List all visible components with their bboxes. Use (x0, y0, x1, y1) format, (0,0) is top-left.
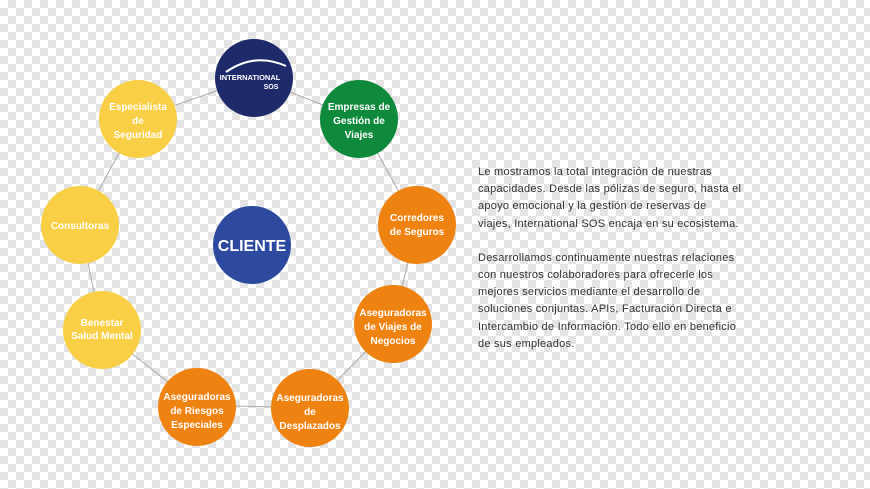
node: Aseguradoras de Viajes de Negocios: de Viajes de (364, 322, 422, 333)
node: Empresas de Gestión de Viajes: Empresas de (328, 102, 391, 113)
text block: description: de sus empleados. (478, 338, 575, 350)
node: Especialista de Seguridad: Seguridad (114, 130, 162, 141)
text block: description: capacidades. Desde las pólizas de seguro, hasta el (478, 183, 741, 195)
text block: description: mejores servicios mediante el desarrollo de (478, 286, 700, 298)
node: Empresas de Gestión de Viajes: Viajes (345, 130, 374, 141)
node: Benestar Salud Mental: Salud Mental (71, 331, 133, 342)
text block: description: Le mostramos la total integración de nuestras (478, 166, 712, 178)
node: International SOS: SOS (264, 84, 279, 91)
text block: description (478, 166, 741, 350)
node: Aseguradoras de Riesgos Especiales: Aseguradoras (163, 392, 231, 403)
node: Aseguradoras de Desplazados: Aseguradoras (276, 393, 344, 404)
node: Aseguradoras de Riesgos Especiales: de Riesgos (170, 406, 224, 417)
node: Corredores de Seguros: Corredores (390, 213, 444, 224)
text block: description: apoyo emocional y la gestión de reservas de (478, 200, 706, 212)
center: CLIENTE (213, 206, 291, 284)
text block: description: Intercambio de Información. Todo ello en beneficio (478, 321, 736, 333)
text block: description: con nuestros colaboradores para ofrecerle los (478, 269, 713, 281)
node: International SOS (215, 39, 293, 117)
node: Corredores de Seguros (378, 186, 456, 264)
node: Aseguradoras de Desplazados: de (304, 407, 316, 418)
node: Empresas de Gestión de Viajes (320, 80, 398, 158)
node: Especialista de Seguridad: Especialista (109, 102, 167, 113)
node: Aseguradoras de Viajes de Negocios: Aseguradoras (359, 308, 427, 319)
node: International SOS: INTERNATIONAL (220, 73, 281, 82)
node: Consultoras (41, 186, 119, 264)
node: Aseguradoras de Riesgos Especiales: Especiales (171, 420, 223, 431)
text block: description: viajes, International SOS encaja en su ecosistema. (478, 218, 739, 230)
node: Empresas de Gestión de Viajes: Gestión de (333, 116, 385, 127)
node: Aseguradoras de Viajes de Negocios (354, 285, 432, 363)
node: Corredores de Seguros: de Seguros (390, 227, 445, 238)
node: Aseguradoras de Viajes de Negocios: Negocios (370, 336, 416, 347)
node: Especialista de Seguridad (99, 80, 177, 158)
node: Aseguradoras de Desplazados: Desplazados (279, 421, 341, 432)
center: CLIENTE: CLIENTE (218, 238, 287, 255)
text block: description: soluciones conjuntas. APIs, Facturación Directa e (478, 303, 732, 315)
node: Aseguradoras de Riesgos Especiales (158, 368, 236, 446)
text block: description: Desarrollamos continuamente nuestras relaciones (478, 252, 734, 264)
node: Benestar Salud Mental: Benestar (81, 318, 124, 329)
node: Consultoras: Consultoras (51, 221, 110, 232)
node: Benestar Salud Mental (63, 291, 141, 369)
node: Especialista de Seguridad: de (132, 116, 144, 127)
node: Aseguradoras de Desplazados (271, 369, 349, 447)
